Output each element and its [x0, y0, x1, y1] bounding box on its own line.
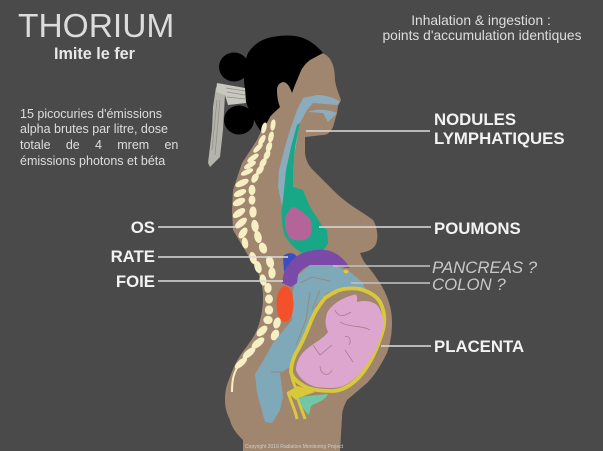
spleen	[283, 253, 297, 272]
text block: dose: alpha brutes par litre, dose	[20, 122, 168, 136]
lung	[285, 207, 312, 240]
uterus and placenta	[291, 288, 384, 391]
fetus detail lines	[313, 310, 370, 374]
liver	[276, 286, 294, 322]
copyright: Copyright 2016 Radiation Monitoring Project	[245, 444, 344, 450]
labels left: OS	[131, 218, 155, 237]
title: THORIUM	[18, 8, 174, 45]
body silhouette	[225, 53, 392, 451]
fetus	[296, 295, 383, 388]
labels right: LYMPHATIQUES	[434, 129, 565, 148]
subtitle: Imite le fer	[54, 45, 136, 63]
lungs tract	[282, 123, 328, 255]
labels right: NODULES	[434, 110, 516, 129]
text block: dose: 15 picocuries d'émissions	[20, 107, 162, 121]
labels left	[111, 218, 155, 291]
labels right: PANCREAS ?	[432, 258, 538, 277]
text block: inhalation: Inhalation & ingestion :	[411, 13, 551, 28]
hair buns	[219, 52, 254, 134]
labels right: COLON ?	[432, 275, 506, 294]
labels left: FOIE	[116, 272, 155, 291]
leader lines	[158, 131, 431, 346]
labels right: PLACENTA	[434, 337, 524, 356]
text block: inhalation: points d'accumulation identiques	[383, 28, 582, 43]
text block: dose	[20, 107, 178, 168]
labels right	[432, 110, 565, 356]
hair	[244, 36, 323, 132]
text block: dose: émissions photons et béta	[20, 154, 165, 168]
hair tie and tassel	[208, 83, 246, 167]
cervix	[288, 372, 305, 419]
labels right: POUMONS	[434, 219, 521, 238]
colon fold lines	[271, 277, 330, 372]
amniotic tissue	[298, 394, 328, 415]
text block: dose: totale de 4 mrem en	[20, 138, 178, 152]
text block: inhalation	[383, 13, 582, 43]
labels left: RATE	[111, 247, 155, 266]
pancreas	[344, 270, 348, 274]
airway	[278, 95, 340, 206]
stomach / pancreas region	[282, 250, 350, 287]
intestines	[255, 265, 366, 423]
spine	[232, 120, 281, 392]
body figure	[208, 36, 392, 451]
